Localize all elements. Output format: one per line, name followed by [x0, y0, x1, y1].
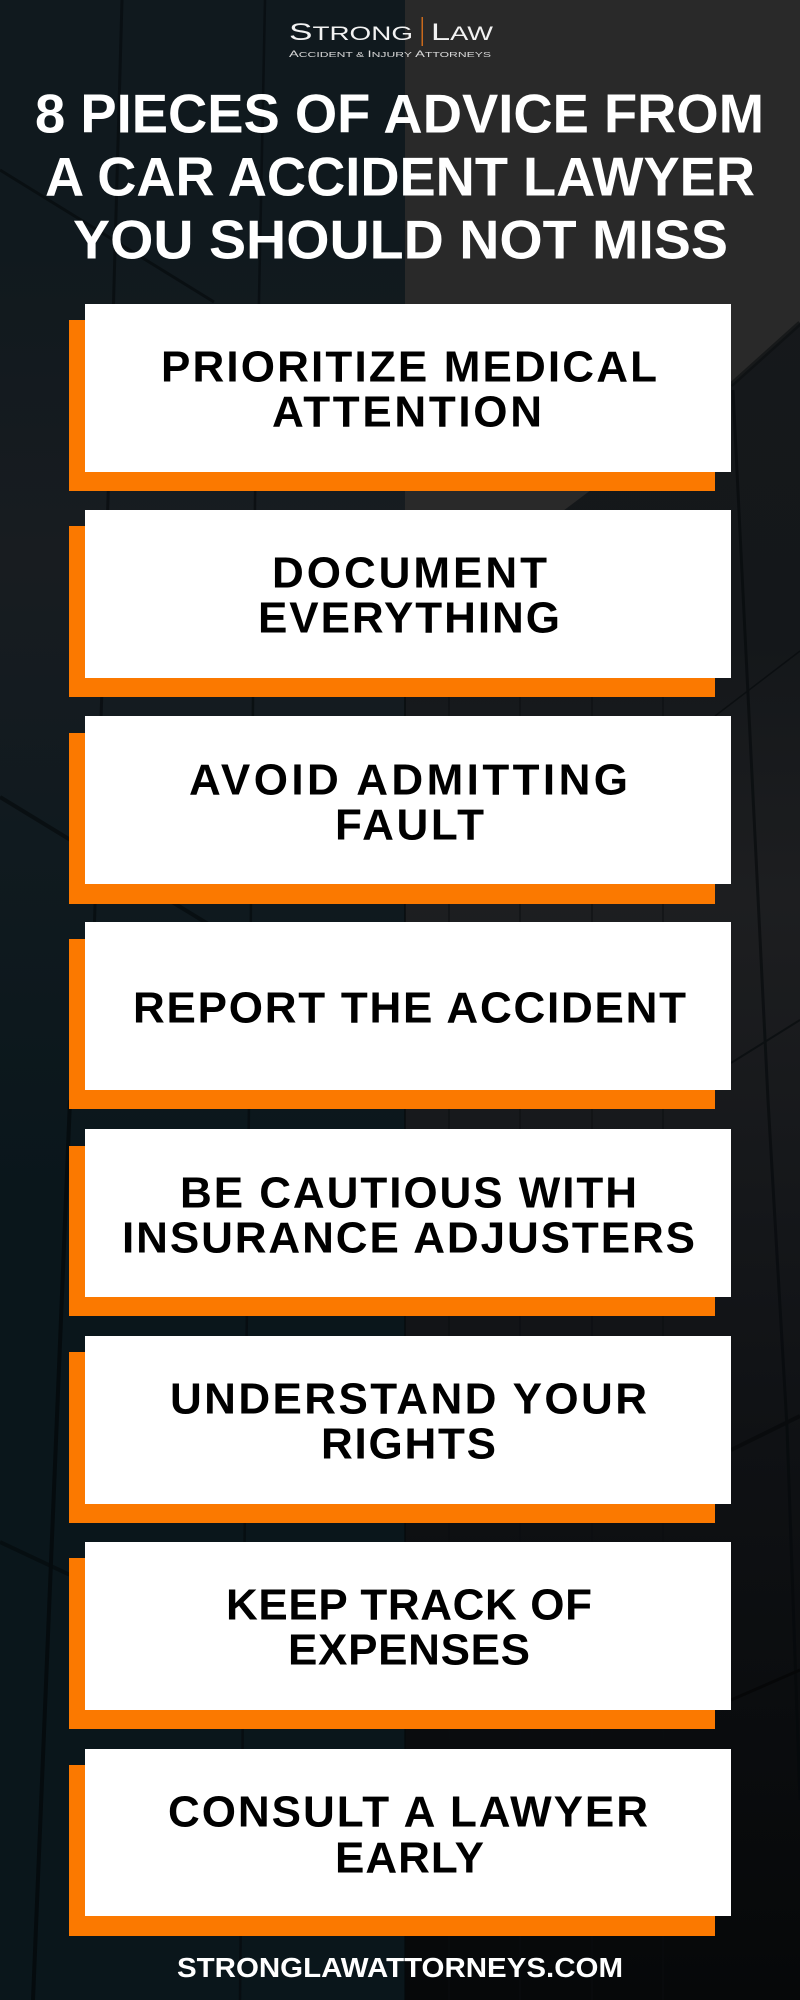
card 7: keep track of expenses: KEEP TRACK OF	[226, 1580, 592, 1630]
card 3: avoid admitting fault: AVOID ADMITTING	[189, 756, 628, 804]
card 3: avoid admitting fault	[69, 716, 731, 904]
title	[35, 82, 764, 270]
card 5: be cautious with insurance adjusters: INSURANCE ADJUSTERS	[122, 1214, 695, 1262]
card 8: consult a lawyer early	[69, 1749, 731, 1936]
card 5: be cautious with insurance adjusters	[69, 1129, 731, 1316]
logo tagline: A CCIDENT & INJURY A TTORNEYS	[289, 49, 491, 59]
logo wordmark: Strong: S TRONG	[289, 19, 413, 46]
card 6: understand your rights	[69, 1336, 731, 1523]
card 8: consult a lawyer early: CONSULT A LAWYER	[168, 1788, 648, 1836]
title: YOU SHOULD NOT MISS	[73, 208, 728, 270]
card 2: document everything: DOCUMENT	[272, 548, 547, 598]
footer: website url: STRONGLAWATTORNEYS.COM	[177, 1952, 623, 1983]
card 1: prioritize medical attention	[69, 304, 731, 491]
card 7: keep track of expenses: EXPENSES	[288, 1626, 530, 1674]
card 6: understand your rights: RIGHTS	[321, 1420, 496, 1468]
card 7: keep track of expenses	[69, 1542, 731, 1729]
card 5: be cautious with insurance adjusters: BE CAUTIOUS WITH	[180, 1168, 637, 1218]
card 8: consult a lawyer early: EARLY	[335, 1834, 484, 1882]
logo divider	[422, 17, 423, 46]
card 2: document everything	[69, 510, 731, 697]
card 4: report the accident	[69, 922, 731, 1109]
card 3: avoid admitting fault: FAULT	[335, 800, 484, 850]
logo: Strong Law	[289, 17, 493, 59]
card 1: prioritize medical attention: PRIORITIZE MEDICAL	[161, 342, 657, 392]
logo wordmark: Law: L AW	[431, 19, 493, 46]
card 4: report the accident: REPORT THE ACCIDENT	[133, 984, 686, 1032]
card 1: prioritize medical attention: ATTENTION	[272, 388, 542, 436]
title: 8 PIECES OF ADVICE FROM	[35, 82, 764, 144]
card 2: document everything: EVERYTHING	[258, 594, 560, 642]
card 6: understand your rights: UNDERSTAND YOUR	[170, 1374, 647, 1424]
title: A CAR ACCIDENT LAWYER	[45, 146, 755, 208]
